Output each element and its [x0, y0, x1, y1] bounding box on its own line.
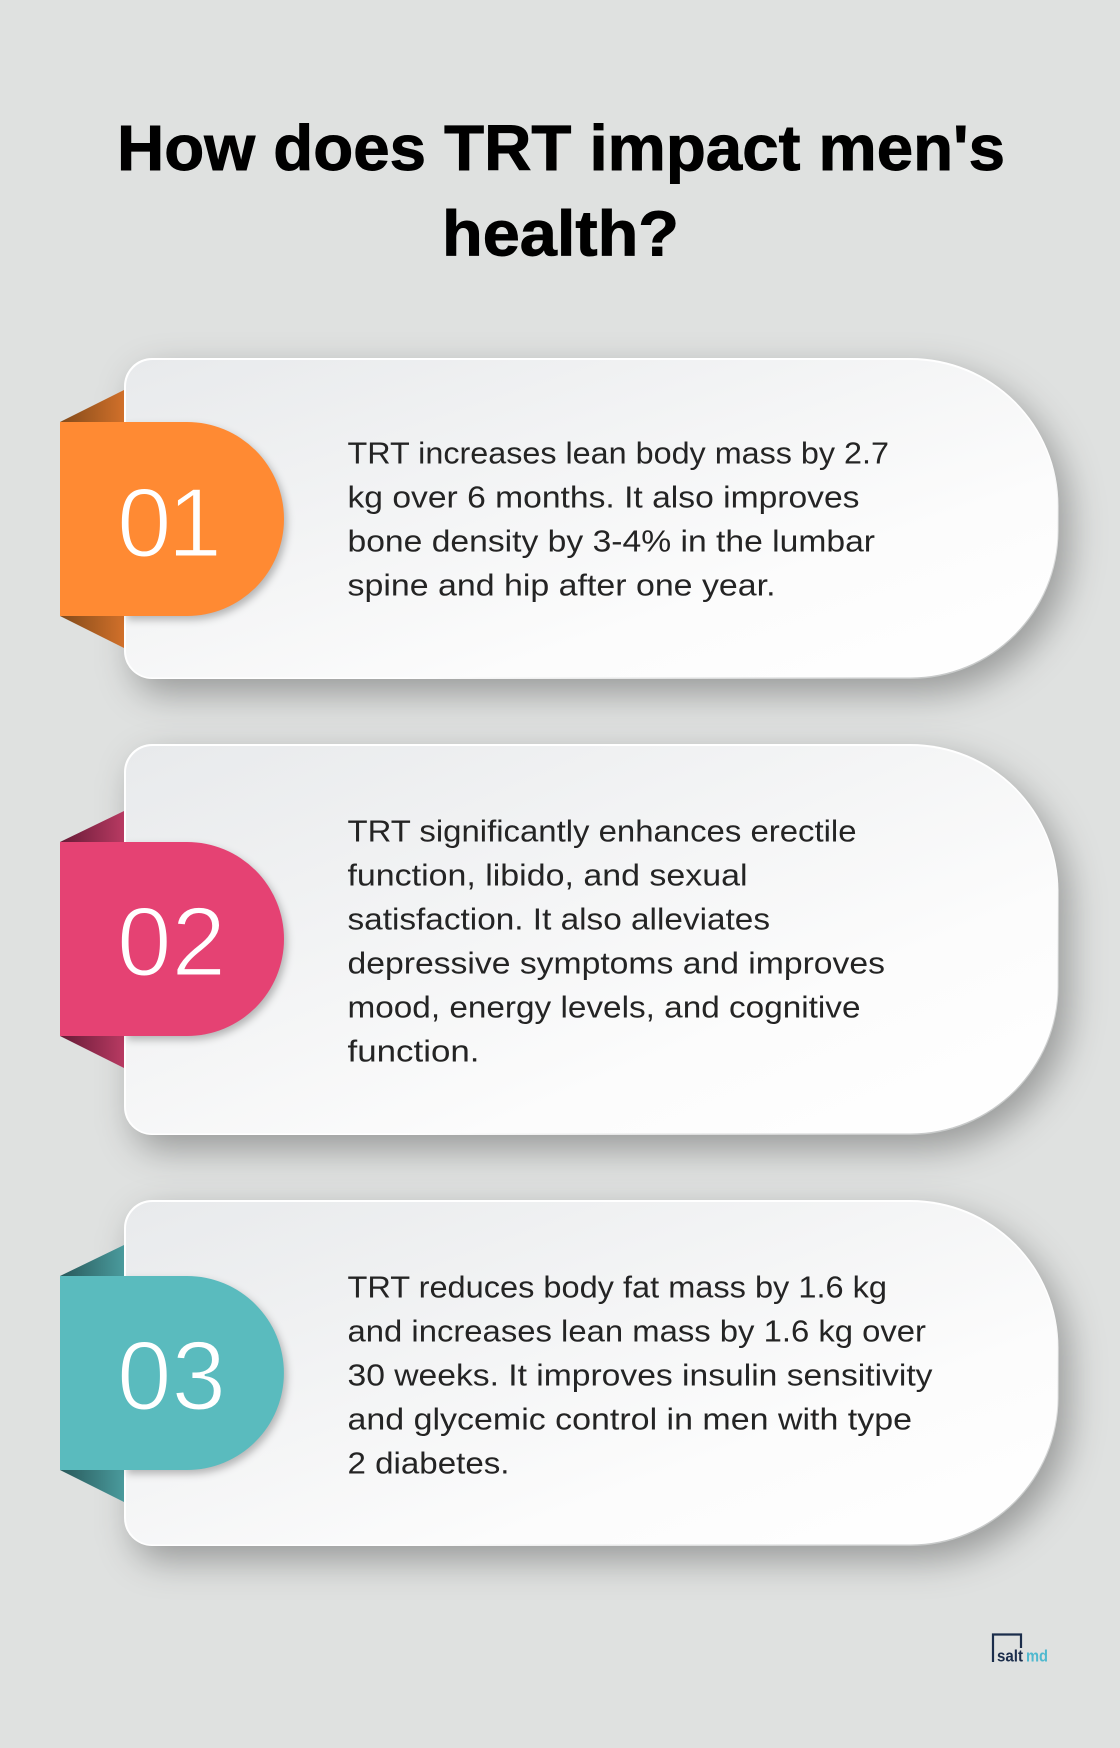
text 03	[348, 1270, 933, 1480]
ribbon fold top 01	[60, 390, 124, 422]
text 03: and increases lean mass by 1.6 kg over	[348, 1314, 926, 1348]
logo wordmark: md	[1026, 1646, 1048, 1666]
logo: saltmd	[993, 1634, 1048, 1666]
title	[117, 112, 1005, 270]
badge shadow 01	[127, 426, 287, 620]
text 03: 30 weeks. It improves insulin sensitivity	[348, 1358, 933, 1392]
logo bracket	[993, 1634, 1021, 1662]
badge shadow 02	[127, 846, 287, 1040]
number badge 03	[60, 1276, 284, 1470]
badge shadow 03	[127, 1280, 287, 1474]
text 02: TRT significantly enhances erectile	[348, 814, 856, 849]
number badge 02	[60, 842, 284, 1036]
text 02: function, libido, and sexual	[348, 858, 748, 893]
text 02: mood, energy levels, and cognitive	[348, 990, 860, 1025]
text 02: function.	[348, 1034, 480, 1069]
logo wordmark: salt	[997, 1646, 1023, 1666]
text 01	[348, 435, 889, 602]
card 03	[124, 1200, 1058, 1546]
card shadow 02	[134, 758, 1068, 1149]
text 01: bone density by 3-4% in the lumbar	[348, 523, 875, 558]
title: health?	[442, 198, 679, 270]
text 02	[348, 814, 885, 1069]
text 01: spine and hip after one year.	[348, 567, 776, 602]
number 03: 03	[117, 1320, 226, 1430]
panel: item 03	[60, 1200, 1068, 1560]
card 01	[124, 358, 1058, 679]
text 03: and glycemic control in men with type	[348, 1402, 912, 1436]
ribbon fold bottom 01	[60, 616, 124, 648]
card shadow 01	[134, 372, 1068, 693]
text 03: TRT reduces body fat mass by 1.6 kg	[348, 1270, 887, 1304]
text 03: 2 diabetes.	[348, 1446, 510, 1480]
ribbon fold bottom 03	[60, 1470, 124, 1502]
card 02	[124, 744, 1058, 1135]
number badge 01	[60, 422, 284, 616]
panel: item 02	[60, 744, 1068, 1149]
panel: item 01	[60, 358, 1068, 693]
logo wordmark	[997, 1646, 1048, 1666]
number 01: 01	[117, 468, 222, 578]
title: How does TRT impact men's	[117, 112, 1005, 184]
number 02: 02	[117, 886, 226, 996]
card shadow 03	[134, 1214, 1068, 1560]
ribbon fold bottom 02	[60, 1036, 124, 1068]
text 01: kg over 6 months. It also improves	[348, 479, 860, 514]
ribbon fold top 03	[60, 1245, 124, 1276]
text 02: satisfaction. It also alleviates	[348, 902, 770, 937]
ribbon fold top 02	[60, 811, 124, 842]
text 02: depressive symptoms and improves	[348, 946, 885, 981]
text 01: TRT increases lean body mass by 2.7	[348, 435, 889, 470]
